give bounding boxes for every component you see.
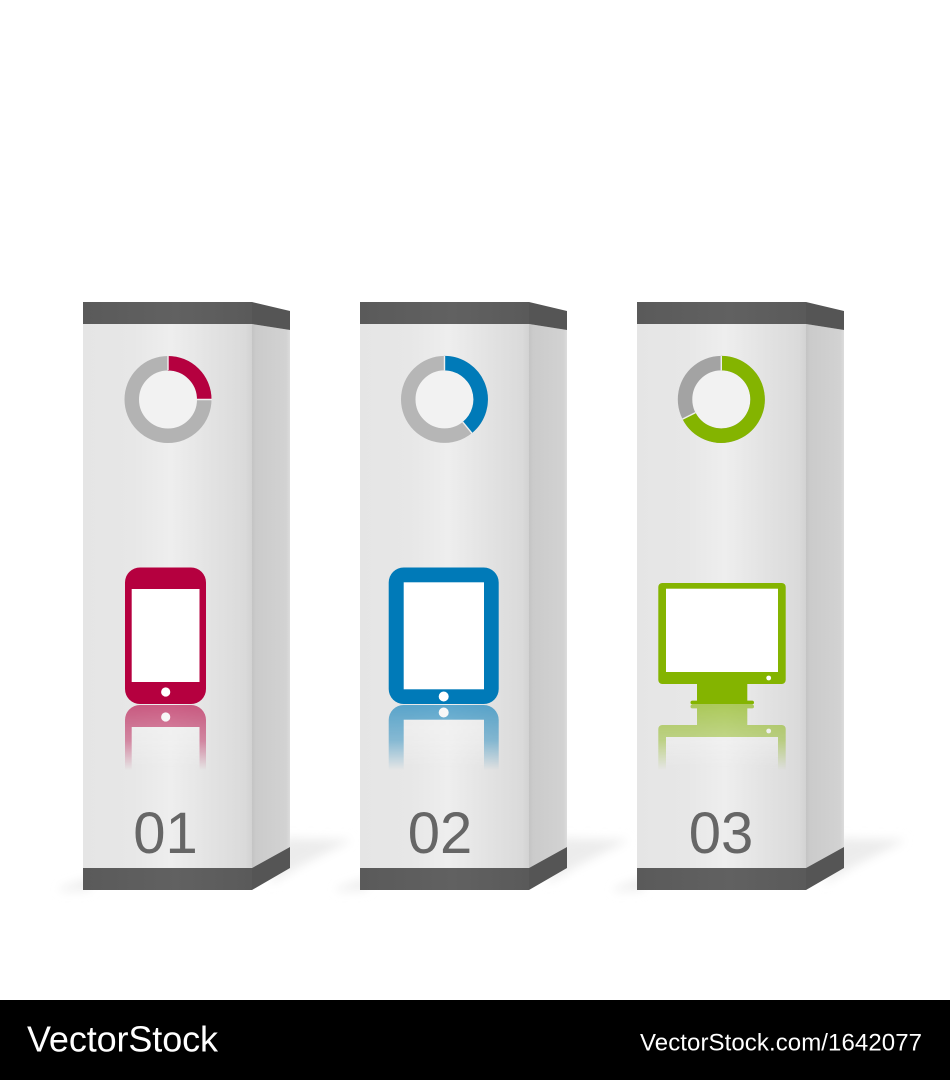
floor shadow [337, 838, 629, 891]
box 3 [614, 302, 906, 891]
floor shadow [60, 838, 352, 891]
icon: smartphone [125, 568, 206, 704]
number 03: 03 [689, 801, 753, 866]
icon: desktop monitor [658, 583, 786, 704]
floor shadow [614, 838, 906, 891]
top band [360, 302, 567, 330]
icon: tablet [389, 568, 499, 704]
footer bar [0, 1000, 950, 1080]
side face [252, 324, 290, 868]
top band [637, 302, 844, 330]
icon reflection: smartphone [125, 705, 206, 768]
side face [529, 324, 567, 868]
icon reflection: desktop monitor [658, 704, 786, 768]
donut chart 2 [408, 356, 481, 436]
footer logo text: VectorStock [27, 1018, 219, 1060]
bottom band [83, 847, 290, 890]
box 1 [60, 302, 352, 891]
front face [83, 324, 252, 868]
number 02: 02 [408, 801, 472, 866]
footer image id text: VectorStock.com/1642077 [640, 1030, 922, 1057]
bottom band [637, 847, 844, 890]
donut chart 1 [132, 356, 212, 436]
bottom band [360, 847, 567, 890]
box 2 [337, 302, 629, 891]
icon reflection: tablet [388, 705, 499, 768]
side face [806, 324, 844, 868]
top band [83, 302, 290, 330]
front face [360, 324, 529, 868]
front face [637, 324, 806, 868]
donut chart 3 [682, 356, 758, 436]
number 01: 01 [133, 801, 198, 866]
